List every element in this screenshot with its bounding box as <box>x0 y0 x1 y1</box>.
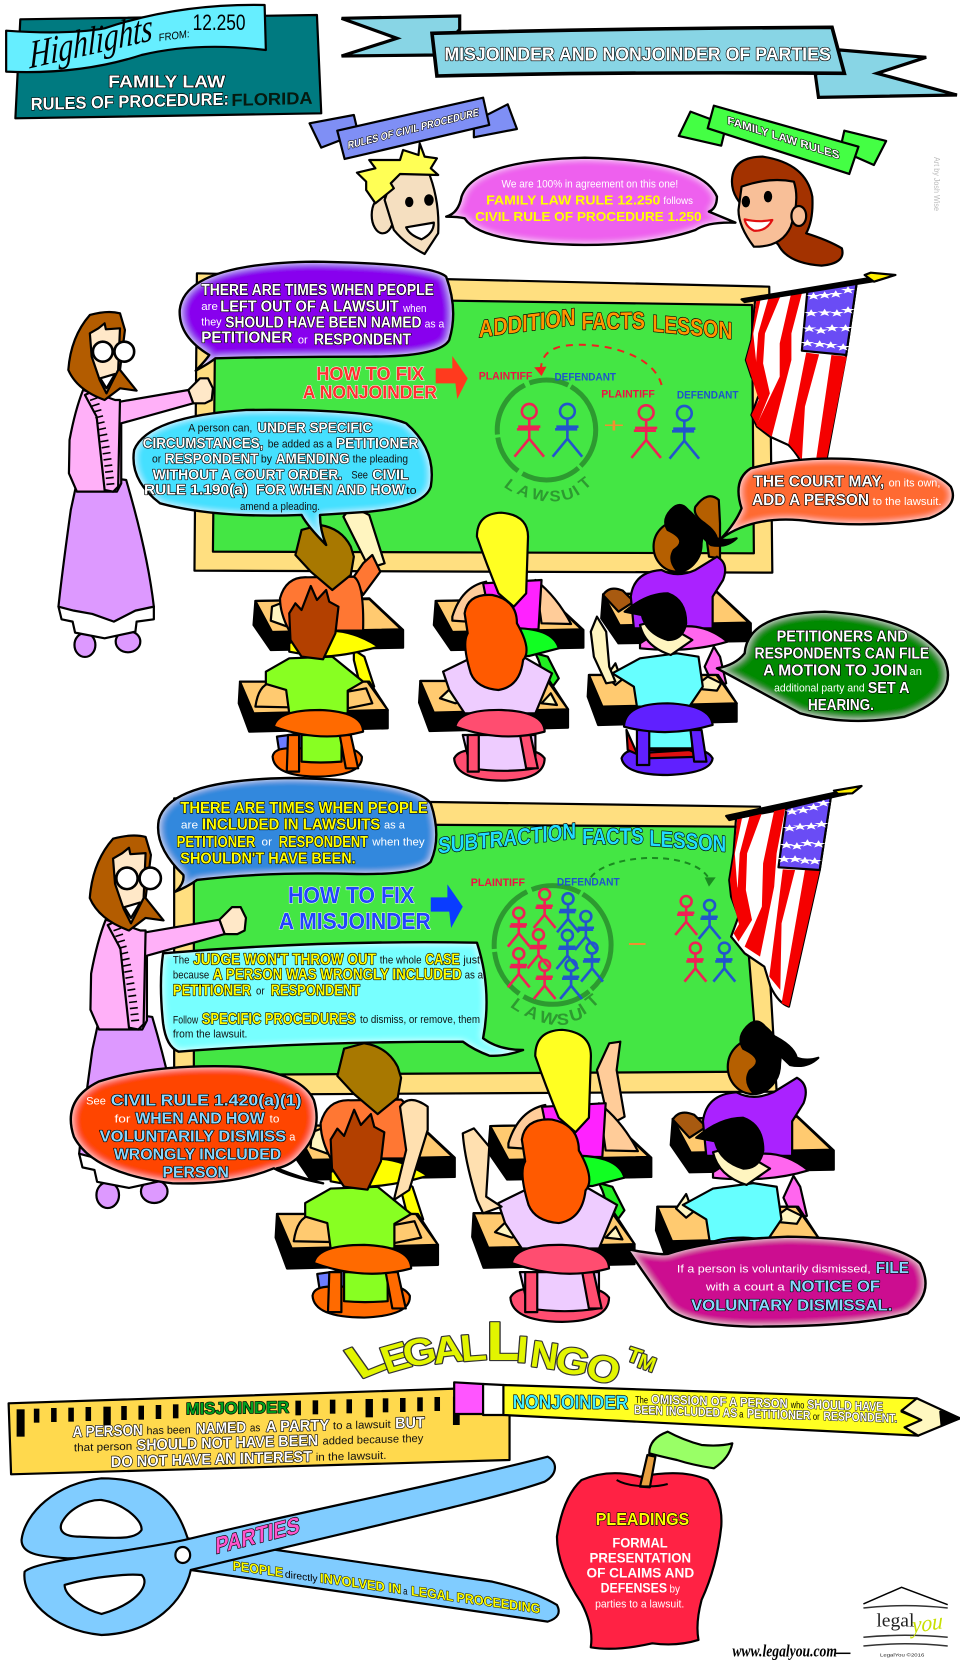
apple: pleadings: OF CLAIMS AND <box>586 1566 694 1581</box>
lesson heading: subtraction facts lesson: SUBTRACTION <box>438 818 576 859</box>
lesson heading: addition facts lesson: FACTS <box>582 307 645 335</box>
speech bubble: under specific circumstances: PETITIONER <box>336 435 419 451</box>
diagram: addition plaintiffs and defendants: PLAINTIFF <box>479 371 533 382</box>
flag: ★ <box>816 308 833 319</box>
title: legal lingo: G <box>551 1338 594 1385</box>
flag: ★ <box>816 291 833 301</box>
speech bubble: under specific circumstances: See <box>351 469 368 481</box>
speech bubble: included in lawsuits: SHOULDN'T HAVE BEEN. <box>180 849 356 867</box>
section: second class speech bubbles <box>158 778 523 1056</box>
speech bubble: left out of a lawsuit: THERE ARE TIMES WHEN PEOPLE <box>201 281 434 299</box>
apple: pleadings: PRESENTATION <box>590 1550 691 1566</box>
speech bubble: the court may add a person <box>721 459 953 538</box>
ruler: misjoinder: NAMED <box>196 1418 246 1437</box>
text: family law rules of procedure florida <box>31 73 313 114</box>
speech bubble: judge won't throw out: CASE <box>425 950 460 968</box>
speech bubble: left out of a lawsuit <box>180 262 453 371</box>
banner: highlights from 12.250: 12.250 <box>193 10 246 35</box>
speech bubble: motion to join: additional party and <box>774 682 865 694</box>
speech bubble: civil rule 1.420: to <box>270 1113 279 1125</box>
speech bubble: rule agreement: FAMILY LAW RULE 12.250 <box>486 193 660 208</box>
text: how to fix a misjoinder <box>279 883 431 934</box>
pencil: nonjoinder <box>454 1382 960 1436</box>
speech bubble: left out of a lawsuit: or <box>298 335 308 346</box>
section: first class speech bubbles <box>133 262 953 545</box>
speech bubble: civil rule 1.420 <box>71 1066 323 1183</box>
flag: ★ <box>811 339 828 350</box>
text: how to fix a misjoinder: HOW TO FIX <box>288 883 415 908</box>
title: legal lingo: I <box>515 1329 530 1371</box>
speech bubble: motion to join: HEARING. <box>808 696 874 713</box>
flag: ★ <box>835 343 851 353</box>
flag: ★ <box>813 326 829 337</box>
text: family law rules of procedure florida: RULES OF PROCEDURE: <box>31 90 229 114</box>
banner: highlights from 12.250: FROM: <box>159 28 190 44</box>
flag: ★ <box>805 803 822 813</box>
speech bubble: included in lawsuits <box>158 778 436 892</box>
flag: ★ <box>799 339 816 349</box>
speech bubble: rule agreement <box>446 158 735 245</box>
speech bubble: included in lawsuits: are <box>181 818 198 831</box>
diagram: addition plaintiffs and defendants <box>479 345 739 506</box>
speech bubble: under specific circumstances: to <box>406 485 417 497</box>
speech bubble: left out of a lawsuit: SHOULD HAVE BEEN NAMED <box>225 313 422 331</box>
speech bubble: civil rule 1.420: VOLUNTARILY DISMISS <box>100 1128 286 1145</box>
title: legal lingo: O <box>581 1345 626 1393</box>
speech bubble: notice of voluntary dismissal <box>628 1237 926 1327</box>
flag: ★ <box>789 841 805 852</box>
logo: legal you: LegalYou ©2016 <box>880 1653 924 1658</box>
flag: ★ <box>792 822 808 833</box>
panel: chalkboard <box>194 273 772 573</box>
scissors: parties <box>22 1457 559 1635</box>
speech bubble: civil rule 1.420: CIVIL RULE 1.420(a)(1) <box>111 1091 302 1109</box>
flag: ★ <box>781 824 798 834</box>
speech bubble: judge won't throw out: The <box>173 954 190 966</box>
title: legal lingo: L <box>335 1331 399 1388</box>
speech bubble: civil rule 1.420: WRONGLY INCLUDED <box>114 1146 281 1163</box>
character: woman <box>732 157 843 266</box>
speech bubble: left out of a lawsuit: as a <box>425 317 445 330</box>
logo: legal you: legal <box>876 1610 914 1631</box>
speech bubble: judge won't throw out: RESPONDENT <box>271 981 360 999</box>
speech bubble: under specific circumstances: WITHOUT A COURT ORDER. <box>153 466 342 483</box>
flag: ★ <box>784 807 800 818</box>
text: how to fix a nonjoinder: HOW TO FIX <box>316 363 424 384</box>
flag: ★ <box>840 285 856 296</box>
speech bubble: motion to join: an <box>910 666 922 678</box>
ruler: misjoinder: that person <box>74 1440 132 1454</box>
scissors: parties: a <box>403 1585 408 1597</box>
ruler: misjoinder: MISJOINDER <box>186 1399 289 1418</box>
title: legal lingo: T <box>623 1342 646 1369</box>
speech bubble: under specific circumstances: the pleading <box>353 453 408 465</box>
scissors: parties: PEOPLE <box>233 1559 283 1581</box>
speech bubble: included in lawsuits: RESPONDENT <box>279 833 368 851</box>
ruler: misjoinder <box>9 1389 510 1474</box>
scissors: parties: PARTIES <box>215 1511 300 1559</box>
speech bubble: civil rule 1.420: WHEN AND HOW <box>135 1110 265 1127</box>
flag: ★ <box>810 839 827 850</box>
flag: ★ <box>776 855 792 865</box>
arrow: blue <box>431 884 463 928</box>
speech bubble: under specific circumstances: be added as a <box>268 438 333 450</box>
apple: pleadings <box>557 1432 732 1649</box>
flag: ★ <box>837 323 854 334</box>
teacher <box>79 835 246 1208</box>
speech bubble: included in lawsuits: or <box>262 836 272 848</box>
apple: pleadings: FORMAL <box>612 1535 668 1551</box>
flag <box>726 786 862 1007</box>
speech bubble: notice of voluntary dismissal: with a court a <box>705 1281 785 1293</box>
title: legal lingo: L <box>486 1310 525 1372</box>
speech bubble: under specific circumstances <box>133 410 432 545</box>
title: legal lingo: N <box>528 1333 561 1378</box>
flag: ★ <box>778 840 795 851</box>
flag: ★ <box>815 799 832 809</box>
speech bubble: included in lawsuits: as a <box>384 818 405 831</box>
flag: ★ <box>795 805 811 816</box>
pencil: nonjoinder: BEEN INCLUDED AS <box>634 1402 737 1420</box>
text: how to fix a misjoinder: A MISJOINDER <box>279 909 431 934</box>
speech bubble: judge won't throw out: just <box>463 954 480 966</box>
raised arms: second class front <box>394 1100 502 1213</box>
lesson heading: subtraction facts lesson <box>438 818 726 859</box>
speech bubble: under specific circumstances: or <box>152 453 162 465</box>
section: subtraction facts lesson: LESSON <box>649 826 726 857</box>
pencil: nonjoinder: OMISSION OF A PERSON <box>651 1392 788 1411</box>
logo: legal you <box>863 1587 948 1658</box>
lesson heading: addition facts lesson <box>479 303 732 344</box>
apple: pleadings: parties to a lawsuit. <box>595 1598 684 1610</box>
ribbon: rules of civil procedure: RULES OF CIVIL PROCEDURE <box>348 106 479 152</box>
speech bubble: judge won't throw out: to dismiss, or remove, them <box>360 1014 480 1026</box>
ruler: misjoinder: SHOULD NOT HAVE BEEN <box>137 1431 318 1454</box>
section: highlights header and characters <box>6 5 957 266</box>
title: legal lingo: L <box>458 1326 488 1370</box>
ruler: misjoinder: to a lawsuit <box>333 1418 391 1432</box>
speech bubble: judge won't throw out <box>161 942 523 1056</box>
scissors: parties: LEGAL PROCEEDING <box>411 1584 540 1617</box>
speech bubble: rule agreement: follows <box>663 196 693 207</box>
speech bubble: under specific circumstances: AMENDING <box>276 450 350 467</box>
title: legal lingo <box>335 1310 659 1393</box>
lesson heading: addition facts lesson: ADDITION <box>479 303 575 343</box>
teacher <box>58 312 213 657</box>
speech bubble: judge won't throw out: SPECIFIC PROCEDURES <box>202 1010 356 1027</box>
speech bubble: left out of a lawsuit: LEFT OUT OF A LAWSUIT <box>220 298 399 316</box>
section: subtraction facts lesson <box>79 786 862 1208</box>
section: second class lower bubbles <box>71 1066 926 1327</box>
flag: ★ <box>801 324 818 335</box>
speech bubble: judge won't throw out: PETITIONER <box>173 981 251 999</box>
section: legal lingo glossary <box>9 1310 960 1661</box>
speech bubble: civil rule 1.420: See <box>86 1094 106 1107</box>
raised arms: second class <box>597 1042 625 1125</box>
speech bubble: motion to join: SET A <box>868 679 910 696</box>
lesson heading: subtraction facts lesson: FACTS <box>582 824 644 850</box>
speech bubble: civil rule 1.420: a <box>289 1131 296 1143</box>
flag <box>742 273 895 460</box>
title ribbon: misjoinder and nonjoinder of parties <box>342 16 957 97</box>
ruler: misjoinder: A PERSON <box>73 1421 143 1440</box>
ruler: misjoinder: has been <box>146 1424 191 1437</box>
pencil: nonjoinder: who <box>790 1400 804 1411</box>
speech bubble: judge won't throw out: because <box>173 969 209 981</box>
diagram: addition plaintiffs and defendants: DEFENDANT <box>677 390 739 401</box>
speech bubble: judge won't throw out: A PERSON WAS WRONGLY INCLUDED <box>213 965 462 983</box>
speech bubble: under specific circumstances: by <box>261 453 273 465</box>
title: legal lingo: E <box>375 1334 417 1381</box>
arrow: red <box>436 356 468 399</box>
raised arm: front right student <box>591 617 615 683</box>
title: legal lingo: M <box>635 1350 659 1377</box>
students: second class <box>276 1021 834 1322</box>
speech bubble: under specific circumstances: UNDER SPECIFIC <box>257 419 372 436</box>
flag: ★ <box>807 857 823 867</box>
speech bubble: under specific circumstances: RESPONDENT <box>165 450 259 467</box>
speech bubble: judge won't throw out: Follow <box>173 1014 198 1026</box>
diagram: addition plaintiffs and defendants: PLAINTIFF <box>601 389 655 400</box>
ruler: misjoinder: as <box>250 1422 260 1434</box>
ruler: misjoinder: added because they <box>322 1432 424 1447</box>
flag: ★ <box>823 340 839 351</box>
diagram: subtraction plaintiffs and defendants: LAWSUIT <box>507 990 603 1029</box>
speech bubble: notice of voluntary dismissal: FILE <box>876 1259 909 1276</box>
diagram: addition plaintiffs and defendants: + <box>603 415 625 437</box>
speech bubble: under specific circumstances: amend a pleading. <box>240 501 320 513</box>
ribbon: family law rules: FAMILY LAW RULES <box>727 114 839 162</box>
speech bubble: notice of voluntary dismissal: NOTICE OF <box>790 1277 880 1295</box>
flag: ★ <box>787 855 803 865</box>
apple: pleadings: DEFENSES <box>601 1581 667 1596</box>
speech bubble: rule agreement: CIVIL RULE OF PROCEDURE 1.250 <box>475 210 702 224</box>
diagram: addition plaintiffs and defendants: DEFENDANT <box>554 372 616 383</box>
flag: ★ <box>827 289 844 300</box>
speech bubble: included in lawsuits: PETITIONER <box>177 833 255 851</box>
flag: ★ <box>803 821 819 832</box>
speech bubble: included in lawsuits: when they <box>372 836 425 848</box>
speech bubble: judge won't throw out: from the lawsuit. <box>173 1028 247 1040</box>
speech bubble: under specific circumstances: A person can, <box>188 422 252 434</box>
speech bubble: left out of a lawsuit: are <box>201 300 218 313</box>
ribbon: rules of civil procedure <box>310 98 517 159</box>
title: legal lingo: G <box>398 1329 441 1376</box>
pencil: nonjoinder: The <box>635 1395 648 1406</box>
text: how to fix a nonjoinder: A NONJOINDER <box>303 381 437 402</box>
flag: ★ <box>829 309 845 319</box>
diagram: subtraction plaintiffs and defendants: DEFENDANT <box>557 877 620 888</box>
speech bubble: left out of a lawsuit: PETITIONER <box>201 329 292 347</box>
ruler: misjoinder: in the lawsuit. <box>316 1449 386 1463</box>
speech bubble: under specific circumstances: CIRCUMSTANCES, <box>143 435 263 451</box>
ruler: misjoinder: A PARTY <box>266 1416 329 1435</box>
students: first class <box>239 505 751 781</box>
pencil: nonjoinder: a <box>739 1409 744 1420</box>
panel: chalkboard <box>174 798 777 1095</box>
speech bubble: left out of a lawsuit: RESPONDENT <box>314 331 411 349</box>
speech bubble: civil rule 1.420: for <box>114 1113 131 1125</box>
panel: highlights teal box <box>6 5 321 118</box>
credit: art by josh wise: Art by Josh Wise <box>932 157 942 211</box>
pencil: nonjoinder: or <box>813 1412 820 1423</box>
character: man <box>357 143 438 254</box>
speech bubble: left out of a lawsuit: they <box>201 316 222 328</box>
pencil: nonjoinder: NONJOINDER <box>513 1391 628 1414</box>
speech bubble: judge won't throw out: or <box>256 985 265 997</box>
website url <box>732 1642 850 1661</box>
text: family law rules of procedure florida: FLORIDA <box>231 89 313 110</box>
section: addition facts lesson: LESSON <box>652 310 732 344</box>
speech bubble: left out of a lawsuit: when <box>403 302 426 315</box>
text: family law rules of procedure florida: FAMILY LAW <box>108 73 226 91</box>
scissors: parties: INVOLVED IN <box>320 1571 401 1597</box>
diagram: subtraction plaintiffs and defendants <box>471 858 735 1029</box>
speech bubble: civil rule 1.420: PERSON <box>162 1163 229 1181</box>
speech bubble: judge won't throw out: JUDGE WON'T THROW OUT <box>193 950 376 968</box>
flag: ★ <box>813 819 830 830</box>
speech bubble: included in lawsuits: INCLUDED IN LAWSUITS <box>202 816 380 834</box>
speech bubble: under specific circumstances: FOR WHEN AND HOW <box>256 481 405 498</box>
raised arms: first class <box>343 496 720 595</box>
ruler: misjoinder: BUT <box>395 1413 425 1432</box>
flag: ★ <box>799 839 816 849</box>
apple: pleadings: by <box>670 1583 681 1595</box>
section: addition facts lesson <box>58 273 895 657</box>
scissors: parties: directly <box>285 1569 318 1585</box>
apple: pleadings: PLEADINGS <box>596 1510 689 1529</box>
ruler: misjoinder: DO NOT HAVE AN INTEREST <box>111 1447 312 1470</box>
diagram: subtraction plaintiffs and defendants: PLAINTIFF <box>471 877 525 889</box>
flag: ★ <box>824 324 840 334</box>
speech bubble: included in lawsuits: THERE ARE TIMES WHEN PEOPLE <box>180 799 428 817</box>
speech bubble: motion to join <box>717 612 948 721</box>
ribbon: family law rules <box>679 106 886 174</box>
speech bubble: judge won't throw out: the whole <box>380 954 422 966</box>
speech bubble: rule agreement: We are 100% in agreement on this one! <box>502 179 678 190</box>
diagram: addition plaintiffs and defendants: LAWSUIT <box>501 474 595 506</box>
title: legal lingo: A <box>429 1327 466 1372</box>
speech bubble: judge won't throw out: as a <box>465 969 484 981</box>
flag: ★ <box>797 856 813 867</box>
flag: ★ <box>805 291 822 302</box>
text: how to fix a nonjoinder <box>303 363 437 402</box>
flag: ★ <box>840 305 856 316</box>
pencil: nonjoinder: PETITIONER <box>747 1406 811 1422</box>
speech bubble: under specific circumstances: CIVIL <box>372 466 409 483</box>
banner: highlights from 12.250 <box>6 5 266 78</box>
flag: ★ <box>803 309 819 319</box>
speech bubble: under specific circumstances: RULE 1.190(a) <box>144 481 248 498</box>
